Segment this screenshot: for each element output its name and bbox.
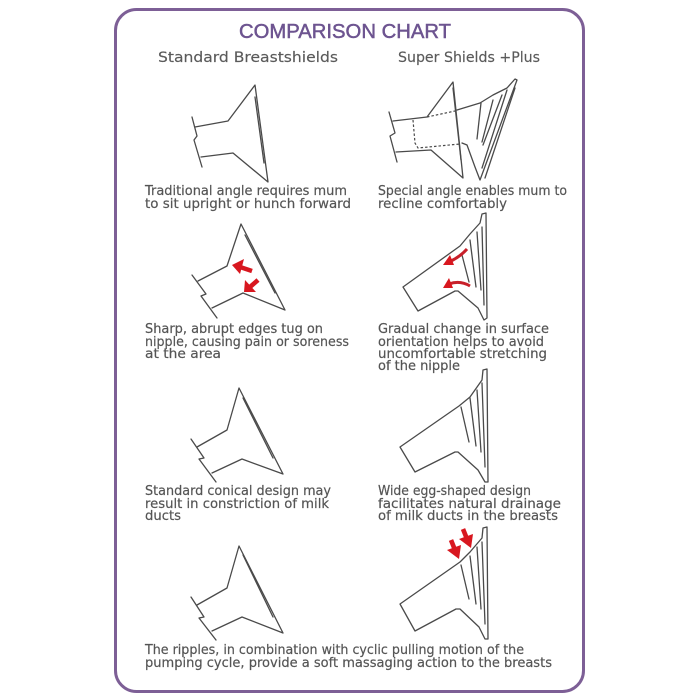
diagram: standard shield with sharp edges bbox=[192, 224, 285, 318]
arrow: upper red bbox=[232, 259, 252, 274]
text: gradual change: orientation helps to avoid bbox=[378, 335, 544, 350]
arrow: lower curved red bbox=[443, 278, 470, 288]
text: conical design: ducts bbox=[145, 509, 181, 524]
text: sharp edges: at the area bbox=[145, 347, 221, 362]
text: traditional angle bbox=[144, 184, 351, 212]
text: sharp edges: Sharp, abrupt edges tug on bbox=[145, 322, 323, 337]
text: special angle bbox=[378, 184, 567, 212]
arrow: upper curved red bbox=[443, 249, 467, 265]
heading: standard breastshields: Standard Breastshields bbox=[158, 50, 338, 66]
diagram: standard conical shield bbox=[191, 388, 283, 482]
text: conical design: Standard conical design may bbox=[145, 484, 331, 499]
text: conical design: result in constriction of milk bbox=[145, 497, 329, 512]
text: gradual change bbox=[378, 322, 549, 374]
arrow: right red bbox=[459, 529, 473, 548]
text: gradual change: of the nipple bbox=[378, 359, 460, 374]
heading: super shields plus: Super Shields +Plus bbox=[398, 50, 540, 66]
text: traditional angle: to sit upright or hunch forward bbox=[145, 197, 351, 212]
text: egg-shaped design: Wide egg-shaped design bbox=[378, 484, 531, 499]
title: COMPARISON CHART bbox=[239, 20, 451, 43]
text: egg-shaped design: of milk ducts in the breasts bbox=[378, 509, 558, 524]
diagram: super shield with gradual surface bbox=[403, 213, 487, 320]
text: special angle: Special angle enables mum to bbox=[378, 184, 567, 199]
text: sharp edges bbox=[145, 322, 349, 362]
text: sharp edges: nipple, causing pain or soreness bbox=[145, 335, 349, 350]
text: gradual change: Gradual change in surface bbox=[378, 322, 549, 337]
panel: chart frame bbox=[116, 10, 584, 692]
diagram: super shield with ripples bbox=[400, 527, 488, 639]
text: egg-shaped design: facilitates natural drainage bbox=[378, 497, 561, 512]
text: traditional angle: Traditional angle requires mum bbox=[144, 184, 347, 199]
diagram: standard shield, traditional angle bbox=[192, 85, 268, 182]
text: ripples: The ripples, in combination with cyclic pulling motion of the bbox=[144, 643, 524, 658]
diagram: wide egg-shaped super shield bbox=[400, 369, 488, 482]
text: egg-shaped design bbox=[378, 484, 561, 524]
diagram: standard shield without ripples bbox=[191, 546, 283, 640]
arrow: left red bbox=[447, 540, 461, 559]
arrow: lower red bbox=[244, 280, 258, 292]
diagram: super shield overlaid on standard shield, reclined angle bbox=[389, 79, 517, 180]
text: ripples bbox=[144, 643, 552, 671]
text: ripples: pumping cycle, provide a soft massaging action to the breasts bbox=[145, 656, 552, 671]
text: special angle: recline comfortably bbox=[378, 197, 507, 212]
text: conical design bbox=[145, 484, 331, 524]
text: gradual change: uncomfortable stretching bbox=[378, 347, 547, 362]
